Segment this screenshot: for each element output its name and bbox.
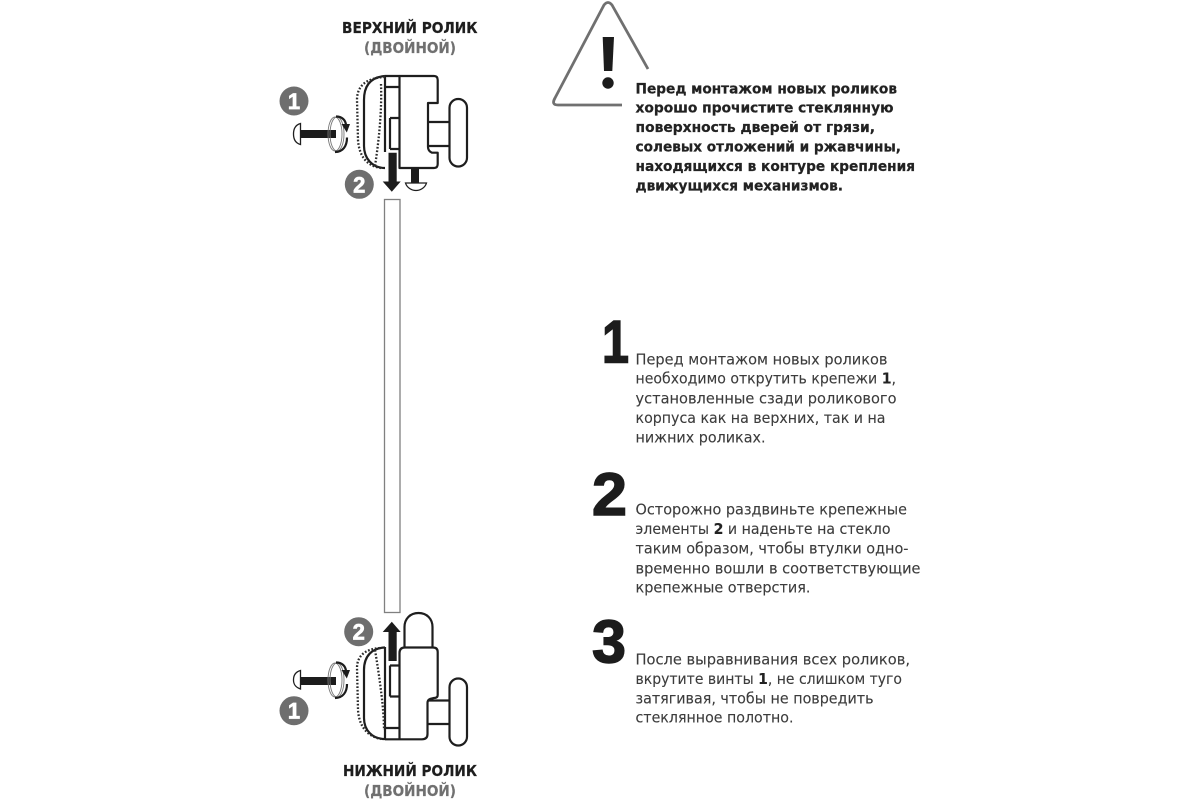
- rotation arrow: [328, 662, 350, 698]
- badge 1: 1: [288, 89, 300, 114]
- step 1: [602, 308, 896, 446]
- warning text: [636, 81, 915, 195]
- knob stem: [428, 700, 450, 724]
- bottom screw: [406, 168, 426, 190]
- clamp dotted open position: [357, 77, 385, 168]
- warning text: Перед монтажом новых роликов: [636, 81, 897, 97]
- step 2 text: таким образом, чтобы втулки одно-: [636, 539, 908, 557]
- heading: lower roller: НИЖНИЙ РОЛИК: [343, 761, 477, 780]
- glass door panel: [384, 200, 400, 612]
- screw 1: [294, 124, 336, 144]
- roller body: [385, 648, 438, 739]
- roller knob: [450, 99, 467, 166]
- step 2 text: Осторожно раздвиньте крепежные: [636, 500, 907, 518]
- step 1 text: необходимо открутить крепежи 1,: [636, 370, 896, 388]
- warning text: находящихся в контуре крепления: [636, 159, 915, 175]
- badge 2: [344, 617, 373, 646]
- step number 2: 2: [592, 461, 627, 528]
- heading: lower roller: (ДВОЙНОЙ): [364, 781, 456, 800]
- step 2 text: элементы 2 и наденьте на стекло: [636, 520, 890, 538]
- step 1 text: [636, 350, 896, 446]
- diagram: upper roller: [280, 76, 467, 199]
- heading: upper roller: ВЕРХНИЙ РОЛИК: [342, 18, 478, 37]
- step 2 text: [636, 500, 920, 597]
- step 1 text: установленные сзади роликового: [636, 389, 896, 407]
- step 3 text: После выравнивания всех роликов,: [636, 650, 910, 668]
- heading: upper roller: [342, 18, 478, 57]
- heading: upper roller: (ДВОЙНОЙ): [364, 38, 456, 57]
- screw 1: [294, 670, 336, 689]
- warning text: поверхность дверей от грязи,: [636, 120, 875, 136]
- step 1 text: нижних роликах.: [636, 428, 766, 446]
- step 3 text: стеклянное полотно.: [636, 708, 794, 726]
- badge 2: 2: [353, 620, 365, 645]
- step 3 text: вкрутите винты 1, не слишком туго: [636, 670, 902, 688]
- badge 1: [280, 86, 308, 116]
- clamp shell: [364, 76, 385, 168]
- step 2 text: крепежные отверстия.: [636, 579, 810, 597]
- step 3 text: затягивая, чтобы не повредить: [636, 689, 874, 707]
- clamp shell: [364, 648, 385, 739]
- clamp dotted open position: [357, 648, 384, 739]
- warning text: хорошо прочистите стеклянную: [636, 101, 894, 117]
- roller knob: [450, 678, 467, 746]
- badge 2: 2: [353, 172, 365, 197]
- roller body: [400, 76, 438, 168]
- badge 2: [345, 170, 374, 199]
- diagram: lower roller: [280, 613, 467, 746]
- step 1 text: корпуса как на верхних, так и на: [636, 409, 886, 427]
- step 1 text: Перед монтажом новых роликов: [636, 350, 888, 368]
- heading: lower roller: [343, 761, 477, 800]
- badge 1: 1: [288, 699, 300, 724]
- arrow down: [383, 153, 401, 192]
- step 2 text: временно вошли в соответствующие: [636, 559, 920, 577]
- step number 1: 1: [602, 308, 629, 376]
- knob stem: [428, 122, 450, 146]
- step 3: [592, 608, 910, 726]
- mounting plate: [385, 76, 400, 152]
- top guide: [404, 613, 432, 647]
- warning text: движущихся механизмов.: [636, 179, 843, 195]
- step 3 text: [636, 650, 910, 726]
- icon: warning triangle: [554, 2, 648, 105]
- rotation arrow: [328, 116, 350, 152]
- step 2: [592, 461, 920, 597]
- mounting plate: [385, 647, 400, 739]
- warning text: солевых отложений и ржавчины,: [636, 140, 901, 156]
- step number 3: 3: [592, 608, 626, 676]
- arrow up: [383, 622, 401, 661]
- badge 1: [280, 696, 308, 725]
